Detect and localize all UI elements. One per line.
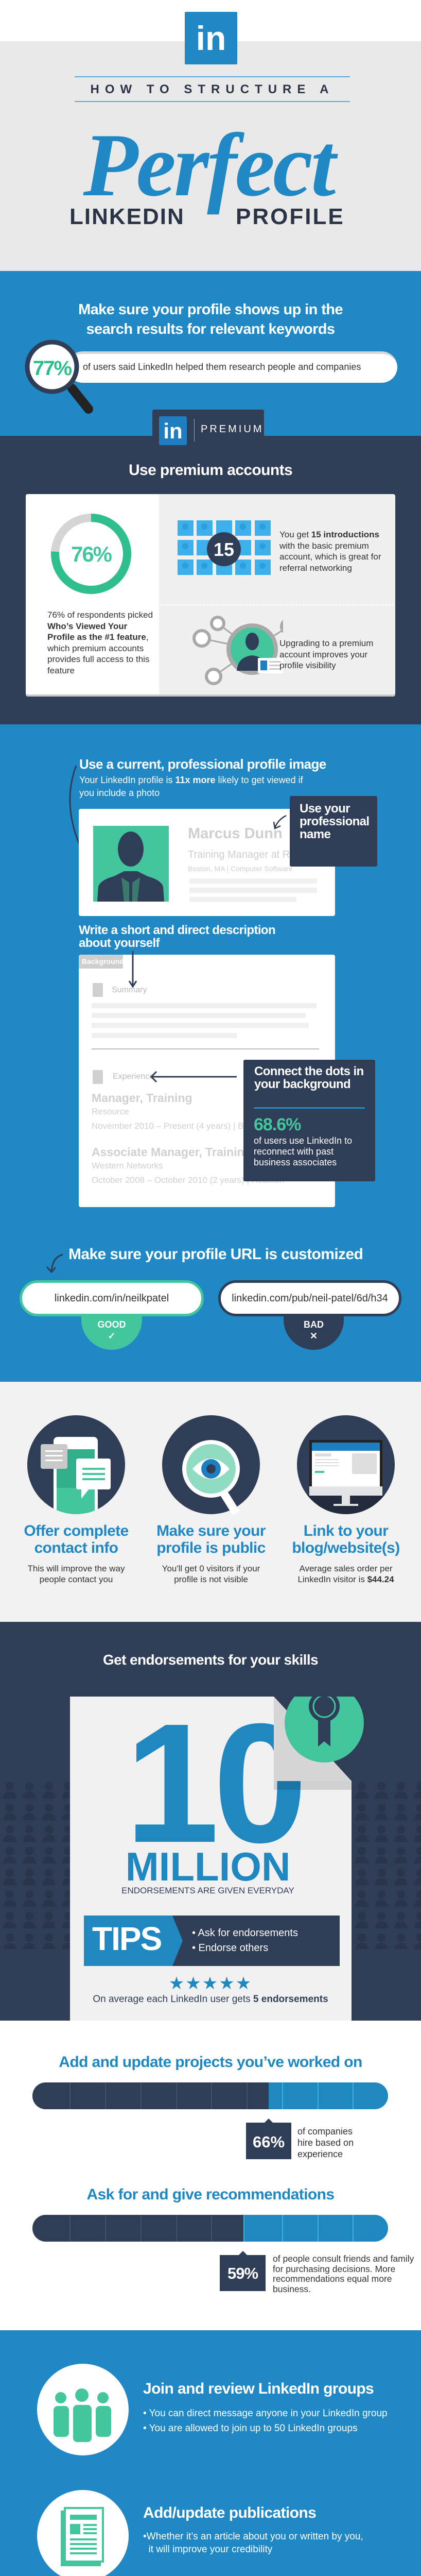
- chart: bar 59%: [32, 2215, 388, 2242]
- tip: groups: [37, 2364, 388, 2455]
- chart: donut 76%: 76%: [71, 542, 112, 566]
- tip: profile public: [156, 1415, 266, 1584]
- panel: background card: Resource: [92, 1107, 129, 1116]
- icon: linkedin logo: [185, 12, 237, 64]
- text: make profile public: Make sure your profile is public: [156, 1522, 266, 1556]
- callout: 66%: experience: [297, 2149, 343, 2159]
- section: premium accounts: [0, 436, 421, 724]
- heading: projects: Add and update projects you’ve worked on: [59, 2054, 362, 2071]
- heading: search results: Make sure your profile shows up in the: [78, 301, 343, 318]
- chart: donut 76%: [51, 514, 131, 594]
- callout: 66%: of companies: [297, 2126, 353, 2137]
- text: 5 endorsements: On average each LinkedIn user gets 5 endorsements: [93, 1994, 328, 2005]
- url: good: ✓: [108, 1331, 116, 1341]
- title: Perfect: Perfect: [83, 115, 334, 215]
- icon: premium logo: PREMIUM: [201, 423, 264, 435]
- url: bad: BAD: [304, 1319, 324, 1330]
- heading: recommendations: Ask for and give recommendations: [87, 2186, 334, 2203]
- icon: stars: ★★★★★: [169, 1974, 252, 1993]
- callout: 66%: 66%: [253, 2133, 285, 2151]
- icon: network visibility: [192, 616, 283, 685]
- arrow: to summary: [129, 951, 137, 988]
- icon: eye magnifier: [162, 1415, 260, 1514]
- text: link to blog: Link to your blog/website(s): [292, 1522, 400, 1556]
- callout: 66%: hire based on: [297, 2138, 354, 2148]
- icon: linkedin logo: in: [196, 19, 226, 57]
- url: good: linkedin.com/in/neilkpatel: [55, 1293, 169, 1304]
- text: offer contact info: Offer complete contact info: [24, 1522, 129, 1556]
- title: LINKEDIN: LINKEDIN: [69, 204, 185, 229]
- premium tab: [152, 410, 264, 436]
- heading: description: about yourself: [79, 936, 160, 950]
- panel: tips: [84, 1916, 340, 1966]
- heading: search results: [78, 301, 343, 337]
- panel: background card: November 2010 – Present (4 years) | Boston, MA: [92, 1121, 283, 1131]
- tip: publications: Add/update publications: [143, 2504, 316, 2521]
- panel: background card: [79, 955, 335, 1207]
- text: upgrading premium: Upgrading to a premium account improves your profile visibility: [279, 638, 373, 670]
- panel: background card: Summary: [112, 986, 147, 994]
- section: header background: [0, 41, 421, 271]
- panel: 10 million card: [70, 1697, 364, 2021]
- text: 15 introductions: You get 15 introductions with the basic premium account, which is great for referral networking: [279, 530, 381, 573]
- callout: connect the dots: Connect the dots in: [254, 1064, 364, 1078]
- tip: groups: • You are allowed to join up to 50 LinkedIn groups: [143, 2423, 358, 2434]
- icon: experience doc: [93, 1070, 103, 1084]
- icon: phone chat: [27, 1415, 125, 1514]
- tip: groups: Join and review LinkedIn groups: [143, 2380, 374, 2397]
- callout: professional name: Use your professional name: [300, 802, 370, 841]
- icon: premium logo: [159, 416, 264, 445]
- tip: blog link: Average sales order per LinkedIn visitor is $44.24: [297, 1564, 394, 1584]
- panel: background card: Manager, Training: [92, 1091, 192, 1105]
- url: bad: linkedin.com/pub/neil-patel/6d/h34: [232, 1293, 388, 1304]
- icon: monitor: [297, 1415, 395, 1514]
- tip: publications: •Whether it’s an article about you or written by you,: [143, 2531, 363, 2542]
- tip: profile public: You'll get 0 visitors if your profile is not visible: [162, 1564, 260, 1584]
- panel: tips: TIPS: [92, 1920, 161, 1957]
- callout: professional name: [290, 796, 377, 867]
- tip: contact info: This will improve the way people contact you: [28, 1564, 125, 1584]
- subtitle: how to structure a: HOW TO STRUCTURE A: [91, 82, 335, 96]
- title: PROFILE: PROFILE: [236, 204, 345, 229]
- callout: connect the dots: [243, 1060, 375, 1181]
- text: Marcus Dunn: Marcus Dunn: [188, 825, 283, 842]
- panel: background card: Associate Manager, Training: [92, 1145, 252, 1159]
- panel: tips: • Ask for endorsements: [192, 1927, 298, 1939]
- section: search keywords: [0, 271, 421, 436]
- icon: magnifier with 77%: [25, 340, 93, 414]
- section: projects and recommendations: [32, 2056, 414, 2292]
- panel: tips: • Endorse others: [192, 1942, 268, 1954]
- callout: connect the dots: of users use LinkedIn to reconnect with past business associates: [254, 1136, 352, 1167]
- chart: bar 66%: [32, 2082, 388, 2109]
- panel: premium card: [26, 494, 395, 694]
- section: three tips: [0, 1382, 421, 1622]
- heading: endorsements: Get endorsements for your skills: [103, 1652, 318, 1668]
- url: bad: [218, 1280, 401, 1350]
- heading: description: [79, 923, 275, 950]
- text: 76% respondents: 76% of respondents picked Who’s Viewed Your Profile as the #1 feature, which premium accounts provides full access to this feature: [47, 610, 153, 675]
- panel: profile card: Training Manager at Reso: [188, 849, 307, 860]
- icon: group: [37, 2364, 129, 2455]
- arrow: url: [46, 1254, 63, 1274]
- arrow: curved to photo: [69, 766, 79, 845]
- callout: connect the dots: 68.6%: [254, 1115, 301, 1134]
- callout: connect the dots: your background: [254, 1077, 350, 1091]
- pattern: people: [3, 1782, 421, 1949]
- icon: magnifier with 77%: 77%: [33, 357, 72, 380]
- icon: profile photo: [93, 826, 169, 902]
- heading: url customized: Make sure your profile URL is customized: [68, 1246, 363, 1263]
- heading: use premium accounts: Use premium accounts: [129, 462, 292, 479]
- section: endorsements: [0, 1622, 421, 2021]
- heading: profile image: Use a current, professional profile image: [79, 756, 326, 772]
- callout: 66%: [246, 2119, 354, 2159]
- url: bad: ✕: [310, 1331, 318, 1341]
- section: profile tips: [0, 724, 421, 1382]
- icon: people grid with 15: [178, 520, 271, 575]
- icon: premium logo: in: [163, 419, 183, 443]
- panel: background card: October 2008 – October 2010 (2 years) | Houston: [92, 1175, 284, 1185]
- panel: background card: Experience: [113, 1072, 154, 1081]
- icon: newspaper: [37, 2490, 129, 2576]
- text: 11x more: Your LinkedIn profile is 11x more likely to get viewed if you include a photo: [79, 775, 303, 798]
- arrow: to experience: [150, 1071, 237, 1082]
- panel: 10 million card: ENDORSEMENTS ARE GIVEN EVERYDAY: [121, 1886, 294, 1895]
- stat pill: 77%: of users said LinkedIn helped them research people and companies: [83, 362, 361, 372]
- callout: 59%: [220, 2251, 414, 2294]
- heading: description: Write a short and direct description: [79, 923, 275, 937]
- panel: 10 million card: MILLION: [126, 1844, 290, 1889]
- icon: summary doc: [93, 983, 103, 997]
- section: activity tips: [0, 2330, 421, 2576]
- tip: contact info: [24, 1415, 129, 1584]
- heading: search results: search results for relevant keywords: [86, 321, 335, 337]
- arrow: to name: [273, 815, 286, 829]
- tip: publications: it will improve your credibility: [149, 2544, 272, 2555]
- panel: background card: Background: [82, 957, 124, 965]
- tip: groups: • You can direct message anyone in your LinkedIn group: [143, 2408, 388, 2419]
- stat pill: 77%: [67, 351, 397, 383]
- callout: 59%: of people consult friends and family for purchasing decisions. More recommendations equal more business.: [273, 2253, 414, 2294]
- url: good: [20, 1280, 204, 1350]
- tip: publications: [37, 2490, 363, 2576]
- panel: profile card: [79, 809, 335, 916]
- tip: blog link: [292, 1415, 400, 1584]
- url: good: GOOD: [97, 1319, 126, 1330]
- panel: background card: Western Networks: [92, 1161, 163, 1171]
- panel: profile card: Boston, MA | Computer Software: [188, 865, 293, 873]
- callout: 59%: 59%: [227, 2264, 258, 2282]
- icon: people grid with 15: 15: [214, 539, 234, 560]
